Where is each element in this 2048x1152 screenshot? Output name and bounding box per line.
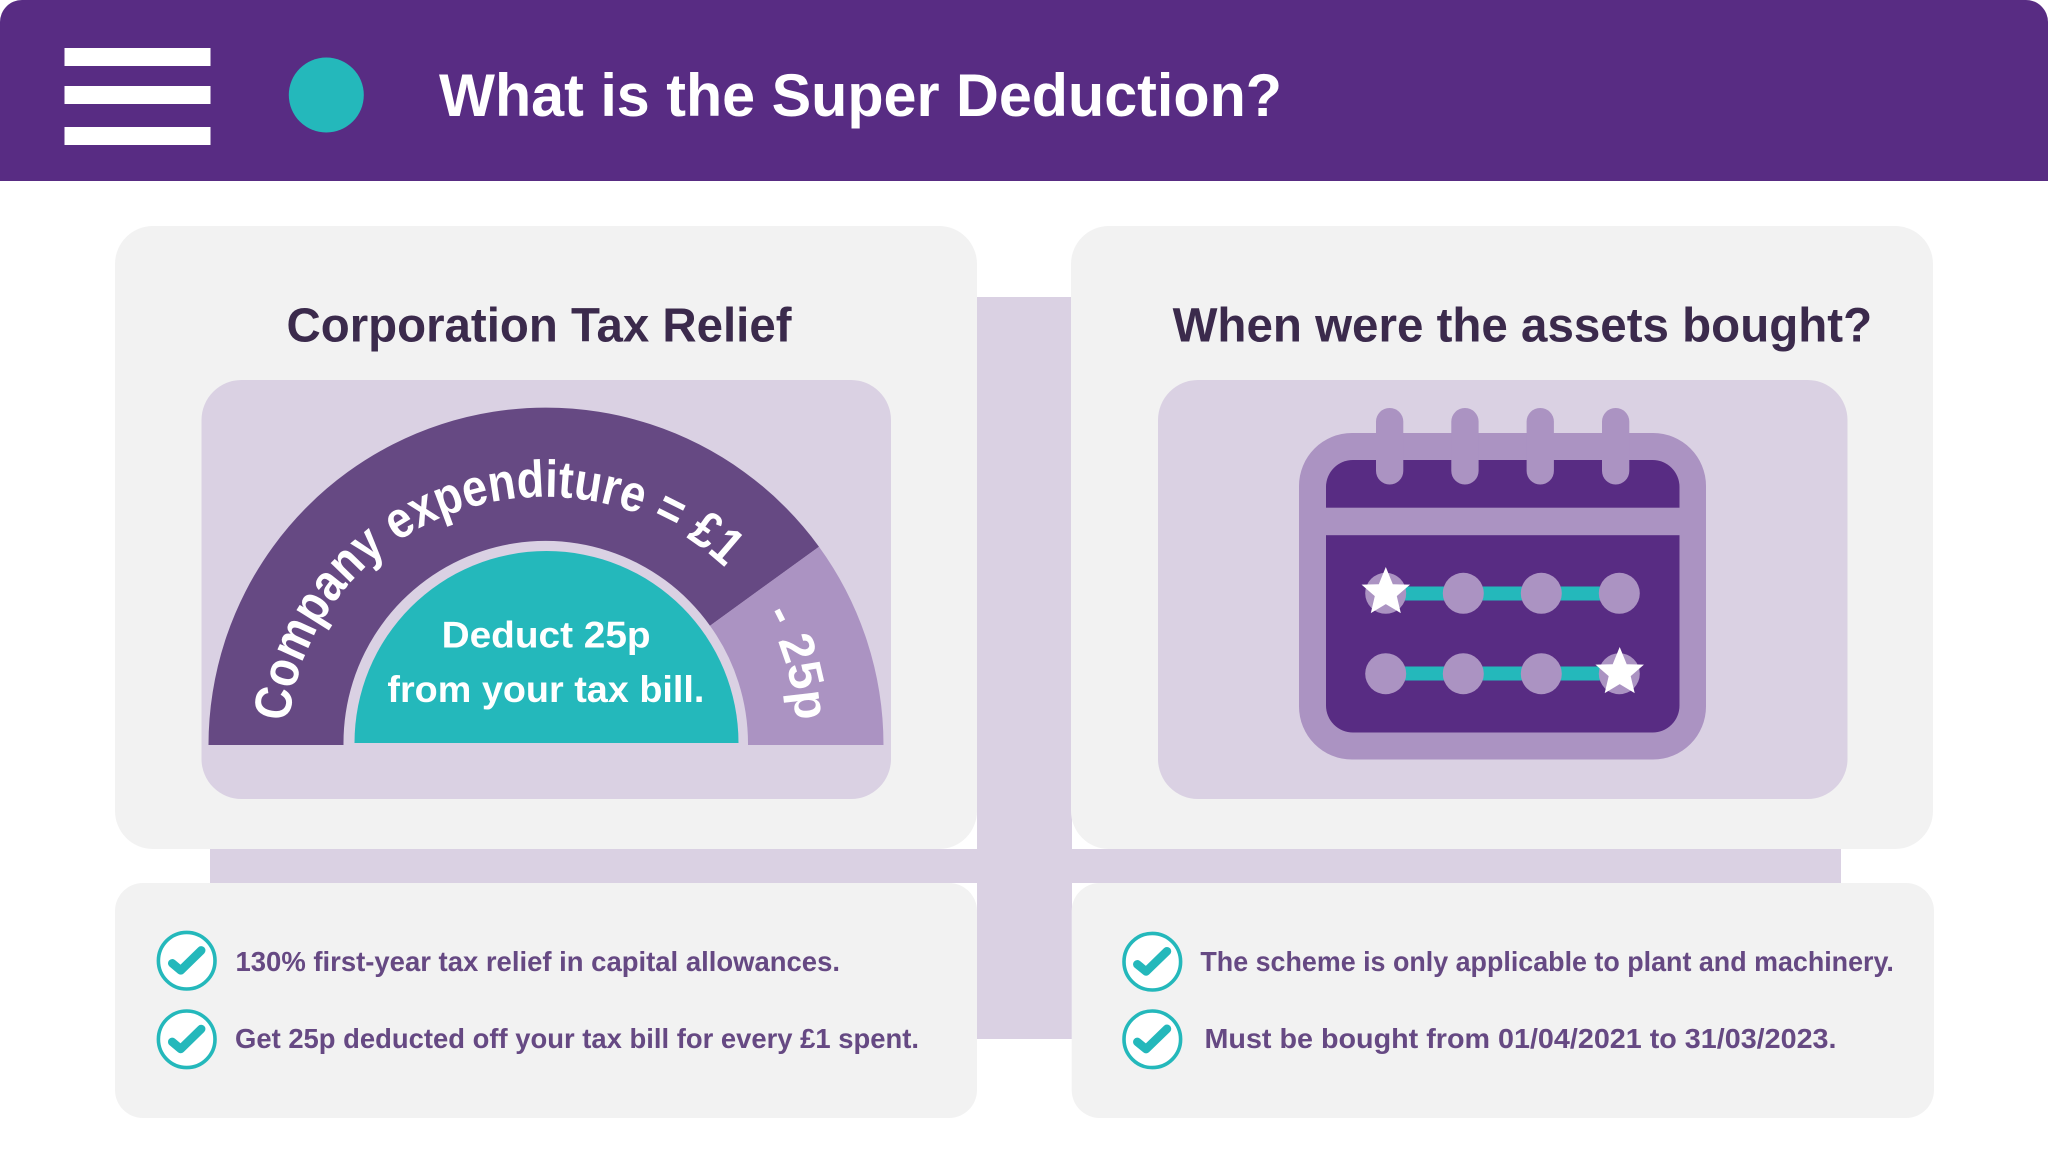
icon: check three <box>1124 933 1181 990</box>
label: minus 25p: - 25p <box>774 608 824 718</box>
panel: tax relief checklist <box>115 883 977 1118</box>
icon: end star <box>1595 647 1644 693</box>
segment: company expenditure <box>208 408 819 745</box>
label: deduct 25p from your tax bill <box>387 615 704 710</box>
text: 25p deducted: Get 25p deducted off your tax bill for every £1 spent. <box>235 1023 919 1054</box>
icon: teal circle <box>289 58 364 132</box>
heading: when were the assets bought: When were the assets bought? <box>1173 300 1872 353</box>
text: plant and machinery: The scheme is only applicable to plant and machinery. <box>1200 946 1894 977</box>
heading: corporation tax relief: Corporation Tax Relief <box>286 300 793 353</box>
icon: menu bars <box>64 48 210 145</box>
chart: semicircle tax relief diagram <box>202 380 891 799</box>
icon: check one <box>158 932 215 989</box>
label: deduct 25p from your tax bill: Deduct 25p <box>442 615 651 656</box>
text: purchase dates: Must be bought from 01/04/2021 to 31/03/2023. <box>1204 1023 1836 1054</box>
text: first-year relief: 130% first-year tax relief in capital allowances. <box>236 946 840 977</box>
label: deduct 25p from your tax bill: from your tax bill. <box>387 669 704 710</box>
icon: check two <box>158 1011 215 1068</box>
segment: minus 25p <box>710 547 884 745</box>
panel: asset eligibility checklist <box>1072 883 1934 1118</box>
panel: corporation tax relief <box>115 226 977 849</box>
segment: deduct 25p <box>354 551 738 743</box>
icon: start star <box>1362 567 1410 613</box>
header banner <box>0 0 2048 181</box>
icon: check four <box>1124 1011 1181 1068</box>
icon: calendar illustration <box>1158 380 1848 799</box>
panel: when were the assets bought <box>1071 226 1933 849</box>
label: company expenditure: Company expenditure = £1 <box>255 459 742 718</box>
title: What is the Super Deduction? <box>439 62 1282 129</box>
